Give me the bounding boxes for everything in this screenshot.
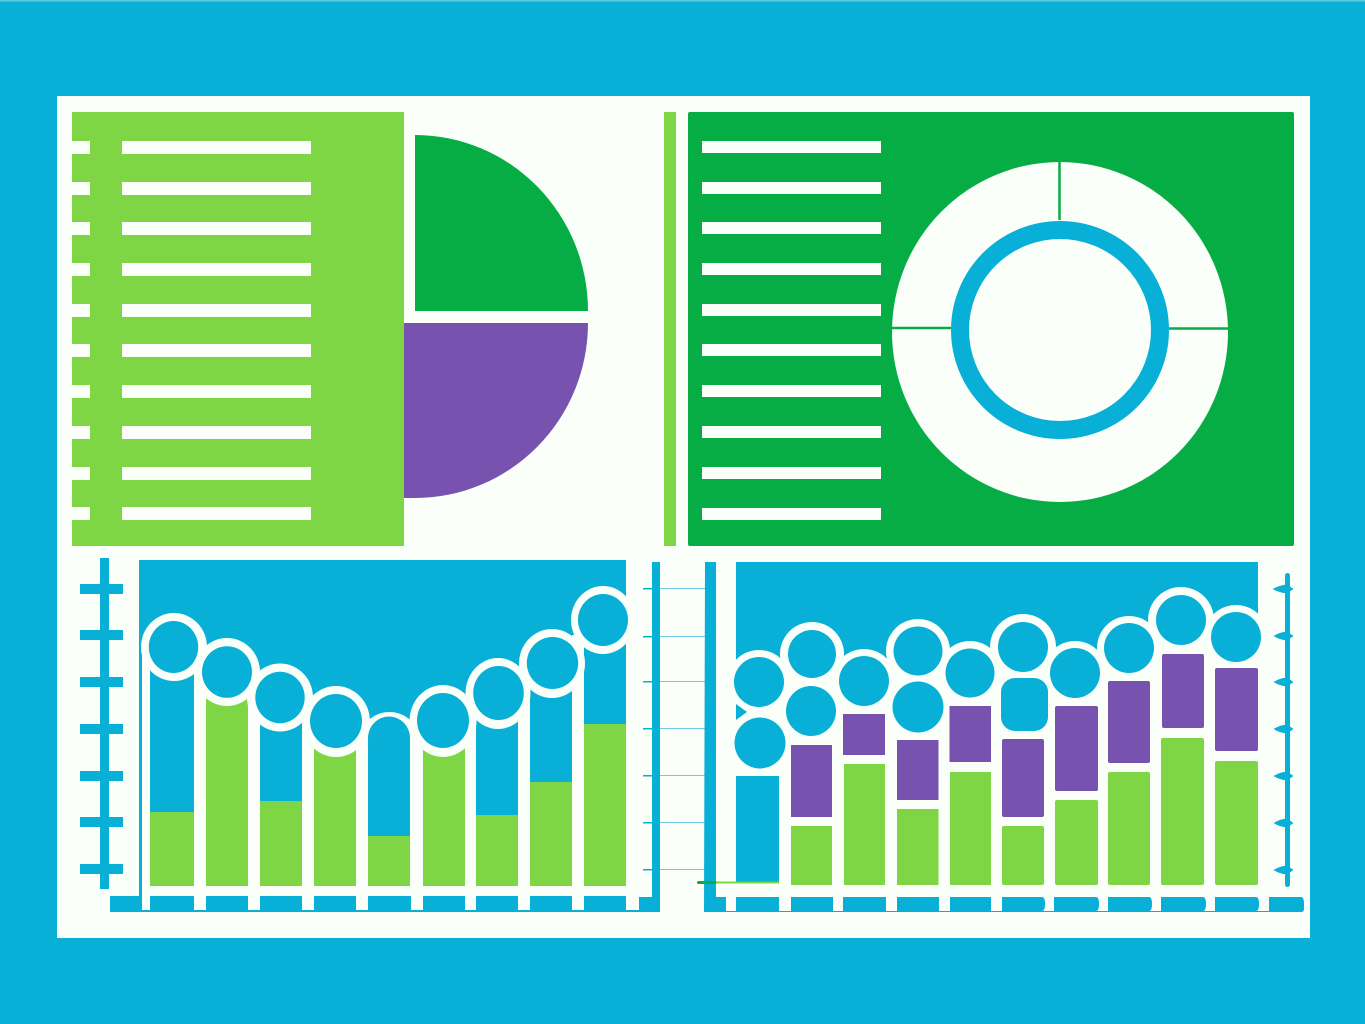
axis: right ticks — [1272, 573, 1294, 887]
main white panel — [57, 96, 1310, 938]
panel: top-left list — [72, 112, 404, 546]
left chart baseline — [110, 562, 660, 912]
panel: top-right list — [688, 112, 1294, 546]
right chart axis and baseline — [704, 562, 1304, 912]
donut chart — [892, 162, 1228, 502]
bar chart: left — [139, 560, 635, 910]
small green baseline mark — [697, 881, 779, 884]
axis: left ticks — [80, 558, 123, 889]
pie chart — [404, 135, 588, 498]
top edge highlight — [0, 0, 1365, 2]
tick lines between charts — [643, 588, 705, 870]
divider bar — [664, 112, 676, 546]
stacked bar chart: right — [727, 562, 1268, 890]
